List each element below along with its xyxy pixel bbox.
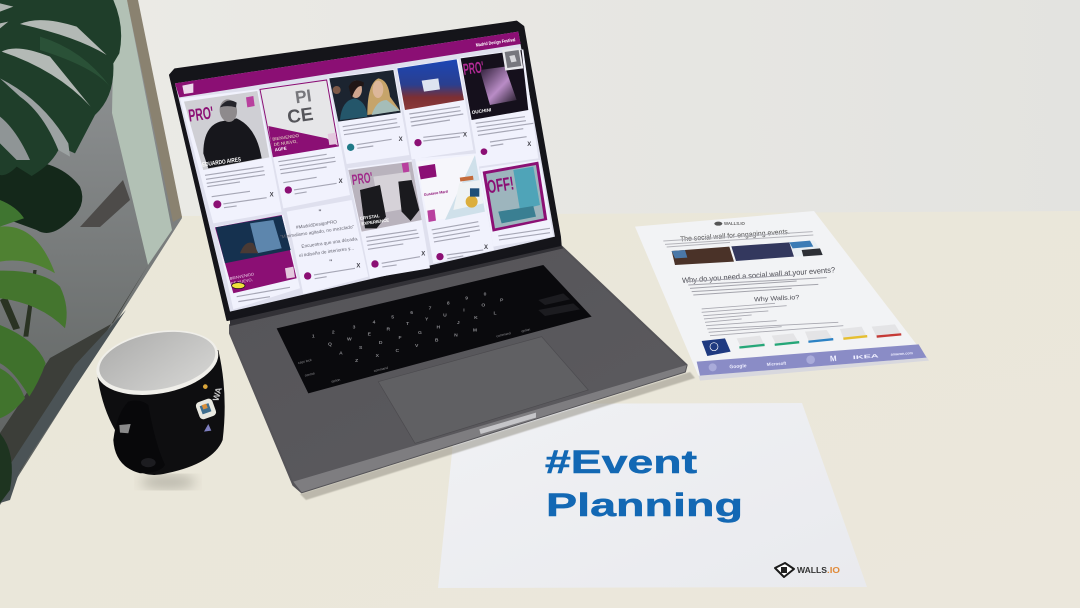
- keyboard: F: [398, 335, 402, 341]
- keyboard: 7: [429, 306, 432, 312]
- keyboard: T: [406, 321, 409, 327]
- flyer logo band: amazon.com: [891, 351, 914, 357]
- keyboard: 8: [447, 301, 450, 307]
- mug handle: [113, 401, 165, 473]
- post 7: quote card: [280, 209, 358, 266]
- window with carpet view: [0, 0, 182, 505]
- mug shadow: [140, 475, 196, 489]
- keyboard: control: [304, 371, 315, 378]
- post 9: triangle interior: Gustavo Martí: [424, 189, 449, 197]
- laptop screen: [170, 22, 561, 320]
- QR code: [502, 48, 523, 71]
- post 1: portrait: EDUARDO AIRES: [202, 157, 242, 169]
- keyboard: P: [500, 298, 504, 304]
- keyboard: U: [443, 312, 447, 318]
- keyboard: B: [435, 338, 439, 344]
- flyer subheading: Why do you need a social wall at your events?: [682, 265, 835, 285]
- keyboard: O: [481, 302, 485, 308]
- mug sticker: [195, 398, 217, 420]
- keyboard: N: [454, 333, 458, 339]
- trackpad: [378, 337, 588, 443]
- flyer photos: [672, 240, 823, 265]
- paper sheet: [438, 403, 867, 588]
- keyboard: V: [415, 343, 419, 349]
- post X icons: X: [421, 252, 425, 258]
- keyboard: M: [473, 327, 477, 333]
- keyboard: 9: [465, 296, 468, 302]
- flyer logo band: Microsoft: [767, 361, 787, 367]
- keyboard: 4: [373, 320, 376, 326]
- window frame: [127, 0, 182, 222]
- mug rim: [91, 321, 223, 404]
- keyboard: G: [418, 330, 422, 336]
- walls.io logo: .IO: [827, 566, 840, 575]
- post 4: auditorium photo: [397, 59, 464, 110]
- post 7: quote card: el #diseño de interiores y...: [299, 245, 354, 258]
- post 7: quote card: ": [329, 259, 332, 266]
- post 2: PIECE: PI: [294, 85, 313, 107]
- post 6: interior with purple band: DE NUEVO,: [231, 277, 253, 286]
- post 5: purple poster: OUCHINI: [471, 107, 492, 115]
- flyer logo band: Google: [729, 363, 747, 370]
- post 7: quote card: #MadridDesignPRO: [296, 219, 338, 230]
- post 1: portrait: PRO': [187, 102, 215, 126]
- keyboard: command: [496, 331, 511, 338]
- green leaves: [0, 200, 67, 503]
- keyboard: L: [493, 311, 496, 317]
- desk surface: [0, 211, 1080, 608]
- sign heading: [545, 444, 743, 523]
- post cards: [180, 49, 553, 309]
- social wall header: Madrid Design Festival: [475, 37, 516, 48]
- keyboard: K: [474, 315, 478, 321]
- post 2: PIECE: AGFE: [274, 146, 287, 152]
- walls.io logo: WALLS: [797, 566, 828, 575]
- post 2: PIECE: DE NUEVO,: [273, 139, 298, 147]
- keyboard: 5: [391, 315, 394, 321]
- post 8: palace photo: PRO': [351, 170, 374, 189]
- laptop base: [230, 240, 687, 492]
- post 7: quote card: Encuentra que una década,: [301, 236, 358, 249]
- flyer on desk: [635, 211, 929, 381]
- coffee mug: WA: [211, 385, 224, 402]
- flyer logo band: M: [830, 354, 837, 363]
- post 3: two women photo: [329, 70, 401, 122]
- keyboard: 0: [484, 292, 487, 298]
- post 1: portrait: [184, 91, 269, 170]
- laptop shadow: [300, 372, 695, 500]
- flyer sheet: [698, 357, 929, 381]
- mug interior: [95, 324, 220, 399]
- keyboard: W: [347, 336, 352, 342]
- post X icons: X: [527, 142, 531, 148]
- sign heading: #Event: [545, 444, 697, 480]
- keyboard: S: [359, 345, 363, 351]
- flyer logo band: [697, 344, 927, 376]
- laptop: [170, 22, 695, 500]
- post 8: palace photo: EXPERIENCE: [361, 217, 390, 226]
- keyboard: X: [376, 353, 380, 359]
- front notch: [479, 413, 536, 434]
- keyboard: option: [521, 327, 531, 333]
- post 7: quote card: "Minimalismo agitado, no mezclado": [280, 224, 355, 240]
- flyer award badges: [702, 324, 902, 356]
- sign heading: Planning: [546, 487, 743, 523]
- keyboard: 2: [332, 329, 335, 335]
- keyboard: command: [373, 366, 389, 373]
- keyboard: 6: [410, 310, 413, 316]
- keyboard: C: [396, 348, 400, 354]
- dark monstera leaf: [0, 0, 121, 233]
- post 8: palace photo: CRYSTAL: [359, 213, 380, 221]
- post X icons: X: [463, 133, 467, 139]
- post 6: interior with purple band: BIENVENIDO: [229, 271, 254, 281]
- wall: [0, 0, 1080, 216]
- post 8: palace photo: [348, 162, 422, 232]
- keyboard: A: [339, 351, 343, 357]
- keyboard: 1: [312, 333, 315, 339]
- keyboard: Y: [425, 316, 429, 322]
- mug body: [97, 350, 225, 475]
- post 9: triangle interior: [417, 155, 485, 222]
- post body text lines: [205, 107, 550, 302]
- flyer logo: [714, 221, 746, 226]
- keyboard: Q: [328, 341, 332, 347]
- post X icons: X: [356, 263, 360, 269]
- social wall header: [175, 32, 521, 97]
- post X icons: X: [270, 193, 274, 199]
- coffee mug: [91, 321, 225, 475]
- keyboard: E: [368, 332, 372, 338]
- post 7: quote card: ": [318, 209, 322, 216]
- post 5: purple poster: PRO': [462, 59, 485, 79]
- screen background: [175, 32, 555, 312]
- keyboard: 3: [353, 325, 356, 331]
- post 10: OFF poster: [483, 162, 547, 232]
- post 2: PIECE: [260, 80, 338, 157]
- post X icons: X: [484, 245, 488, 251]
- post X icons: X: [339, 179, 343, 185]
- post 5: purple poster: [461, 48, 528, 120]
- screen bezel: [170, 22, 561, 320]
- keyboard: [277, 265, 592, 393]
- flyer heading: The social wall for engaging events.: [680, 227, 790, 243]
- keyboard: option: [331, 378, 341, 384]
- keyboard: I: [463, 307, 465, 313]
- keyboard: R: [387, 327, 391, 333]
- post 10: OFF poster: OFF!: [486, 172, 515, 197]
- flyer logo band: IKEA: [853, 353, 880, 361]
- plant: [0, 0, 121, 503]
- keyboard: J: [457, 320, 460, 326]
- keyboard: caps lock: [298, 358, 312, 365]
- flyer logo: WALLS.IO: [724, 221, 746, 226]
- post 2: PIECE: CE: [286, 103, 315, 127]
- post 2: PIECE: BIENVENIDO: [272, 133, 300, 142]
- post avatars: [213, 139, 487, 280]
- post X icons: [270, 133, 531, 269]
- event planning sign: [438, 403, 867, 588]
- post 6: interior with purple band: [215, 215, 297, 293]
- keyboard: H: [437, 325, 441, 331]
- flyer second subheading: Why Walls.io?: [754, 294, 800, 304]
- keyboard: Z: [355, 358, 358, 364]
- post X icons: X: [399, 137, 403, 143]
- keyboard: D: [379, 340, 383, 346]
- walls.io logo: [775, 563, 840, 577]
